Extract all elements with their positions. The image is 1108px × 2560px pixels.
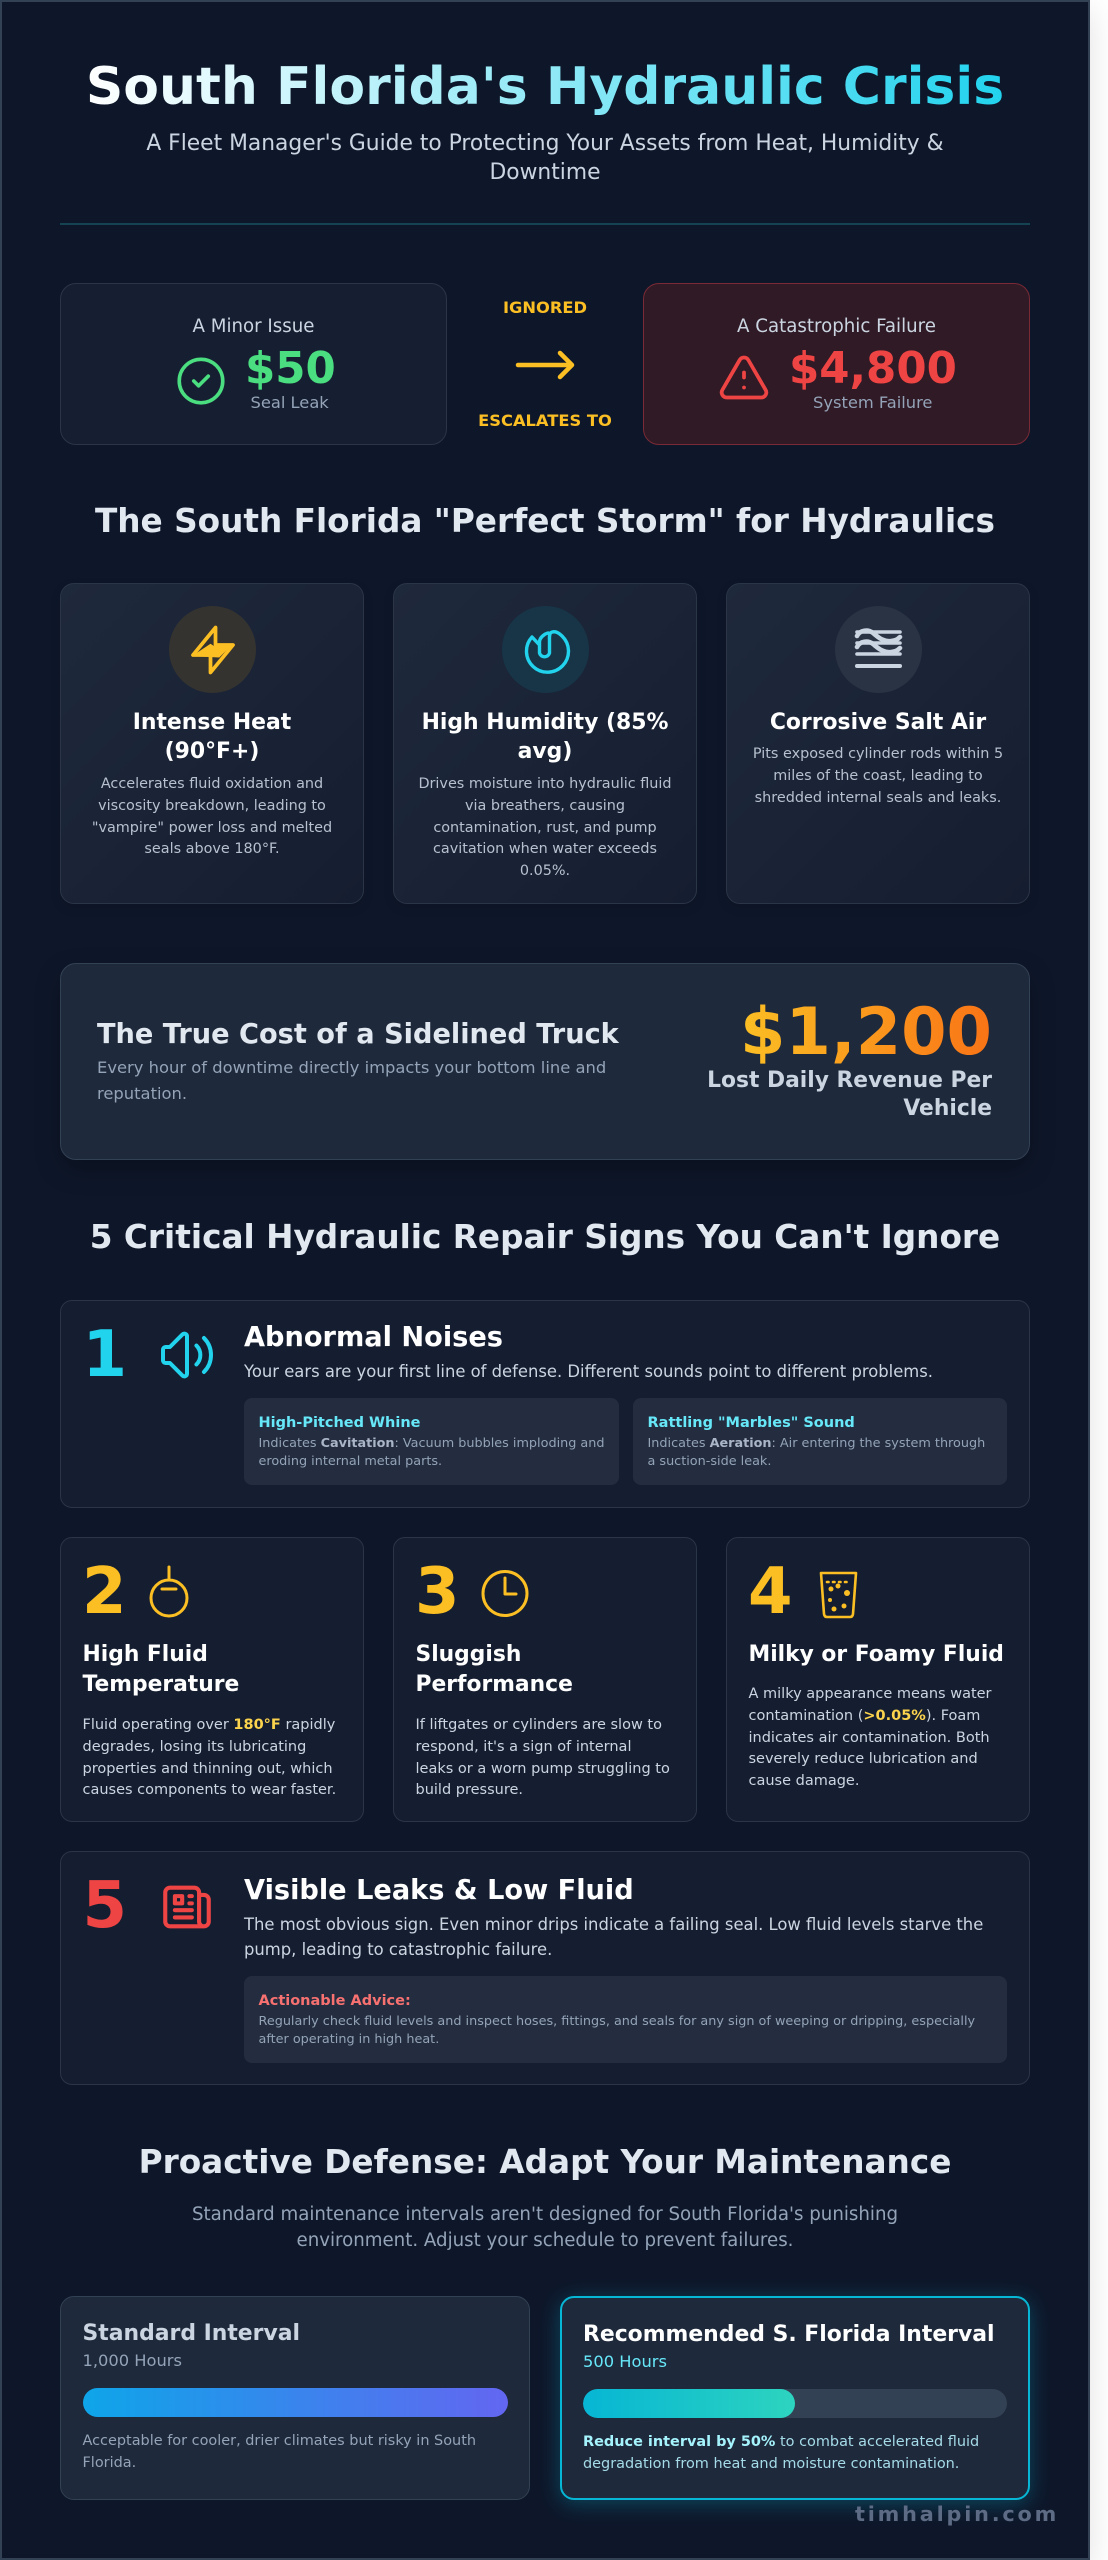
icon: check circle (177, 358, 225, 405)
standard note: Acceptable for cooler, drier climates but risky in South (82, 2433, 476, 2449)
humidity description: 0.05%. (520, 863, 570, 879)
panel: sign 1 abnormal noises (60, 1300, 1030, 1508)
heat title: (90°F+) (165, 739, 259, 764)
sign 2 title (82, 1642, 239, 1696)
humidity title: High Humidity (85% (422, 710, 668, 735)
sign 5 text: The most obvious sign. Even minor drips indicate a failing seal. Low fluid levels starve the (244, 1914, 983, 1934)
humidity description: contamination, rust, and pump (433, 820, 657, 836)
panel: high humidity (393, 583, 697, 904)
heat description: seals above 180°F. (144, 841, 280, 857)
whine title: High-Pitched Whine (258, 1415, 420, 1431)
watermark: timhalpin.com (855, 2502, 1059, 2526)
humidity description: cavitation when water exceeds (433, 841, 657, 857)
sign 5 text (244, 1914, 983, 1959)
number 3: 3 (415, 1555, 460, 1629)
sign 4 text (748, 1686, 992, 1789)
panel: intense heat (60, 583, 364, 904)
recommended hours: 500 Hours (583, 2352, 667, 2371)
sign 3 title: Performance (416, 1672, 573, 1696)
subtitle: A Fleet Manager's Guide to Protecting Your Assets from Heat, Humidity & (146, 131, 944, 156)
recommended note (583, 2434, 979, 2472)
arrow group: ignored escalates to (478, 298, 612, 430)
callout: whine (244, 1398, 619, 1485)
lost revenue label (707, 1068, 992, 1121)
bar fill (583, 2389, 795, 2418)
number 5: 5 (82, 1869, 127, 1943)
sign 4 text: A milky appearance means water (748, 1686, 992, 1702)
lost revenue label: Lost Daily Revenue Per (707, 1068, 992, 1092)
sign 4 title: Milky or Foamy Fluid (748, 1642, 1004, 1667)
humidity title: avg) (518, 739, 572, 764)
$4,800 value: $4,800 (789, 344, 957, 394)
escalates label: ESCALATES TO (478, 411, 612, 430)
standard hours: 1,000 Hours (82, 2351, 182, 2370)
banner heading: The True Cost of a Sidelined Truck (97, 1019, 619, 1050)
sign 2 text: causes components to wear faster. (82, 1782, 336, 1798)
intro text: Standard maintenance intervals aren't designed for South Florida's punishing (192, 2204, 898, 2225)
salt description: Pits exposed cylinder rods within 5 (753, 746, 1003, 762)
advice text: after operating in high heat. (258, 2032, 439, 2047)
$50 value: $50 (245, 344, 336, 394)
icon: speaker (161, 1332, 213, 1378)
panel: standard interval (60, 2296, 530, 2500)
heading: five signs: 5 Critical Hydraulic Repair Signs You Can't Ignore (90, 1218, 1000, 1256)
humidity title (422, 710, 668, 764)
intro text: environment. Adjust your schedule to prevent failures. (297, 2230, 793, 2251)
standard note (82, 2433, 476, 2471)
sign 2 text (82, 1717, 336, 1798)
subtitle: Downtime (489, 160, 600, 185)
humidity description: Drives moisture into hydraulic fluid (418, 776, 672, 792)
bar: 1000 hours (82, 2388, 508, 2417)
heat description (92, 776, 332, 857)
panel: sign 3 sluggish performance (393, 1537, 697, 1822)
intro text (192, 2204, 898, 2251)
sign 3 title (416, 1642, 573, 1696)
number 2: 2 (82, 1555, 127, 1629)
panel: recommended interval (560, 2296, 1030, 2500)
banner text: reputation. (97, 1084, 187, 1103)
sign 2 title: High Fluid (82, 1642, 208, 1667)
salt description: miles of the coast, leading to (773, 768, 983, 784)
salt description (753, 746, 1003, 806)
icon: newspaper (163, 1886, 211, 1928)
subtitle (146, 131, 944, 185)
heading: proactive defense: Proactive Defense: Adapt Your Maintenance (139, 2143, 951, 2181)
panel: sign 2 fluid temperature (60, 1537, 364, 1822)
icon: moisture (502, 606, 589, 693)
sign 1 text: Your ears are your first line of defense. Different sounds point to different problems. (244, 1362, 933, 1381)
arrow (516, 350, 574, 380)
sign 2 text: Fluid operating over 180°F rapidly (82, 1717, 335, 1733)
icon: salt waves (835, 606, 922, 693)
panel: catastrophic failure (643, 283, 1030, 445)
catastrophic label: A Catastrophic Failure (737, 316, 936, 337)
number 1: 1 (82, 1318, 127, 1392)
sign 3 text: leaks or a worn pump struggling to (416, 1761, 670, 1777)
recommended note: Reduce interval by 50% to combat accelerated fluid (583, 2434, 979, 2450)
panel: sign 4 milky fluid (726, 1537, 1030, 1822)
advice title: Actionable Advice: (258, 1993, 411, 2009)
whine text: eroding internal metal parts. (258, 1454, 442, 1469)
standard title: Standard Interval (82, 2321, 300, 2346)
heat description: "vampire" power loss and melted (92, 820, 332, 836)
banner text (97, 1058, 606, 1103)
whine text: Indicates Cavitation: Vacuum bubbles imploding and (258, 1436, 604, 1451)
banner text: Every hour of downtime directly impacts your bottom line and (97, 1058, 606, 1077)
icon: warning triangle (720, 356, 768, 400)
lost revenue label: Vehicle (903, 1096, 992, 1121)
advice text (258, 2014, 975, 2047)
sign 4 text: contamination (>0.05%). Foam (748, 1708, 980, 1724)
sign 1 title: Abnormal Noises (244, 1322, 503, 1353)
minor issue label: A Minor Issue (193, 316, 314, 337)
callout: actionable advice (244, 1976, 1007, 2063)
icon: bolt (169, 606, 256, 693)
heat description: Accelerates fluid oxidation and (101, 776, 323, 792)
sign 3 text (416, 1717, 670, 1798)
salt description: shredded internal seals and leaks. (755, 790, 1001, 806)
panel: true cost banner (60, 963, 1030, 1160)
recommended note: degradation from heat and moisture contamination. (583, 2456, 959, 2472)
callout: marbles (633, 1398, 1007, 1485)
panel: salt air (726, 583, 1030, 904)
marbles text (648, 1436, 985, 1469)
seal leak label: Seal Leak (250, 393, 329, 412)
icon: clock (482, 1570, 528, 1617)
sign 2 text: properties and thinning out, which (82, 1761, 333, 1777)
ignored label: IGNORED (503, 298, 587, 317)
bar: 500 hours (583, 2389, 1007, 2418)
sign 3 title: Sluggish (416, 1642, 521, 1667)
humidity description (418, 776, 672, 879)
marbles text: Indicates Aeration: Air entering the system through (648, 1436, 985, 1451)
recommended title: Recommended S. Florida Interval (583, 2322, 995, 2347)
sign 3 text: build pressure. (416, 1782, 523, 1798)
sign 2 text: degrades, losing its lubricating (82, 1739, 306, 1755)
standard note: Florida. (82, 2455, 136, 2471)
sign 3 text: If liftgates or cylinders are slow to (416, 1717, 662, 1733)
number 4: 4 (748, 1555, 793, 1629)
sign 5 title: Visible Leaks & Low Fluid (244, 1875, 634, 1906)
sign 4 text: indicates air contamination. Both (748, 1730, 990, 1746)
advice text: Regularly check fluid levels and inspect hoses, fittings, and seals for any sign of weeping or dripping, especially (258, 2014, 975, 2029)
humidity description: via breathers, causing (465, 798, 625, 814)
marbles text: a suction-side leak. (648, 1454, 771, 1469)
whine text (258, 1436, 604, 1469)
heat title (133, 710, 291, 764)
sign 5 text: pump, leading to catastrophic failure. (244, 1940, 552, 1959)
system failure label: System Failure (813, 393, 932, 412)
panel: sign 5 visible leaks (60, 1851, 1030, 2085)
sign 4 text: severely reduce lubrication and (748, 1751, 978, 1767)
marbles title: Rattling "Marbles" Sound (648, 1415, 855, 1431)
heat title: Intense Heat (133, 710, 291, 735)
title: South Florida's Hydraulic Crisis (86, 57, 1004, 117)
heat description: viscosity breakdown, leading to (98, 798, 326, 814)
$1,200 value: $1,200 (740, 994, 992, 1070)
sign 3 text: respond, it's a sign of internal (416, 1739, 631, 1755)
salt title: Corrosive Salt Air (770, 710, 986, 735)
sign 4 text: cause damage. (748, 1773, 859, 1789)
panel: minor issue (60, 283, 447, 445)
sign 2 title: Temperature (82, 1672, 239, 1696)
heading: perfect storm: The South Florida "Perfect Storm" for Hydraulics (95, 502, 995, 540)
icon: thermometer (150, 1566, 188, 1618)
icon: glass with bubbles (820, 1572, 858, 1618)
